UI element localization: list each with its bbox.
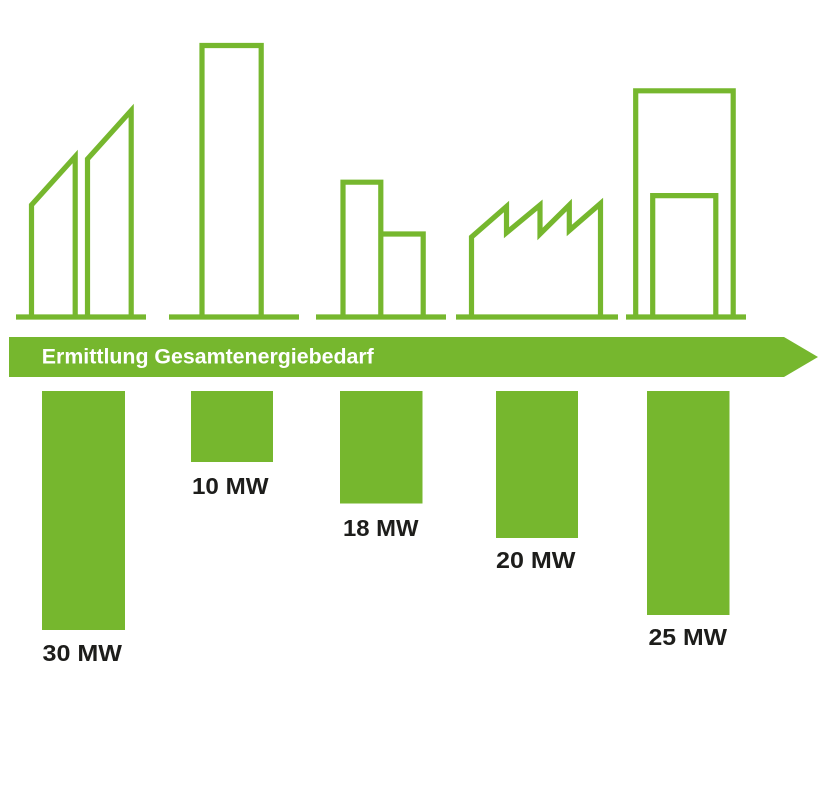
bar: 25 MW: [647, 391, 730, 650]
bar: 20 MW: [496, 391, 578, 573]
bar: 30 MW: 30 MW: [42, 640, 122, 666]
icon: stepped building: [316, 182, 446, 317]
bar: 20 MW: 20 MW: [496, 547, 576, 573]
arrow: Ermittlung Gesamtenergiebedarf: [9, 337, 818, 377]
icon: twin slanted towers: [16, 110, 146, 317]
bar: 18 MW: 18 MW: [343, 515, 419, 541]
icon: factory: [456, 204, 618, 317]
buildings row: [16, 46, 746, 317]
bar: 25 MW: 25 MW: [648, 624, 727, 650]
bar: 18 MW: [340, 391, 422, 541]
icon: building with inner block: [626, 91, 746, 317]
arrow: Ermittlung Gesamtenergiebedarf: Ermittlung Gesamtenergiebedarf: [42, 346, 375, 368]
bar: 30 MW: [42, 391, 125, 666]
icon: tall tower: [169, 46, 299, 317]
bar: 10 MW: [191, 391, 273, 499]
bar: 10 MW: 10 MW: [192, 473, 269, 499]
